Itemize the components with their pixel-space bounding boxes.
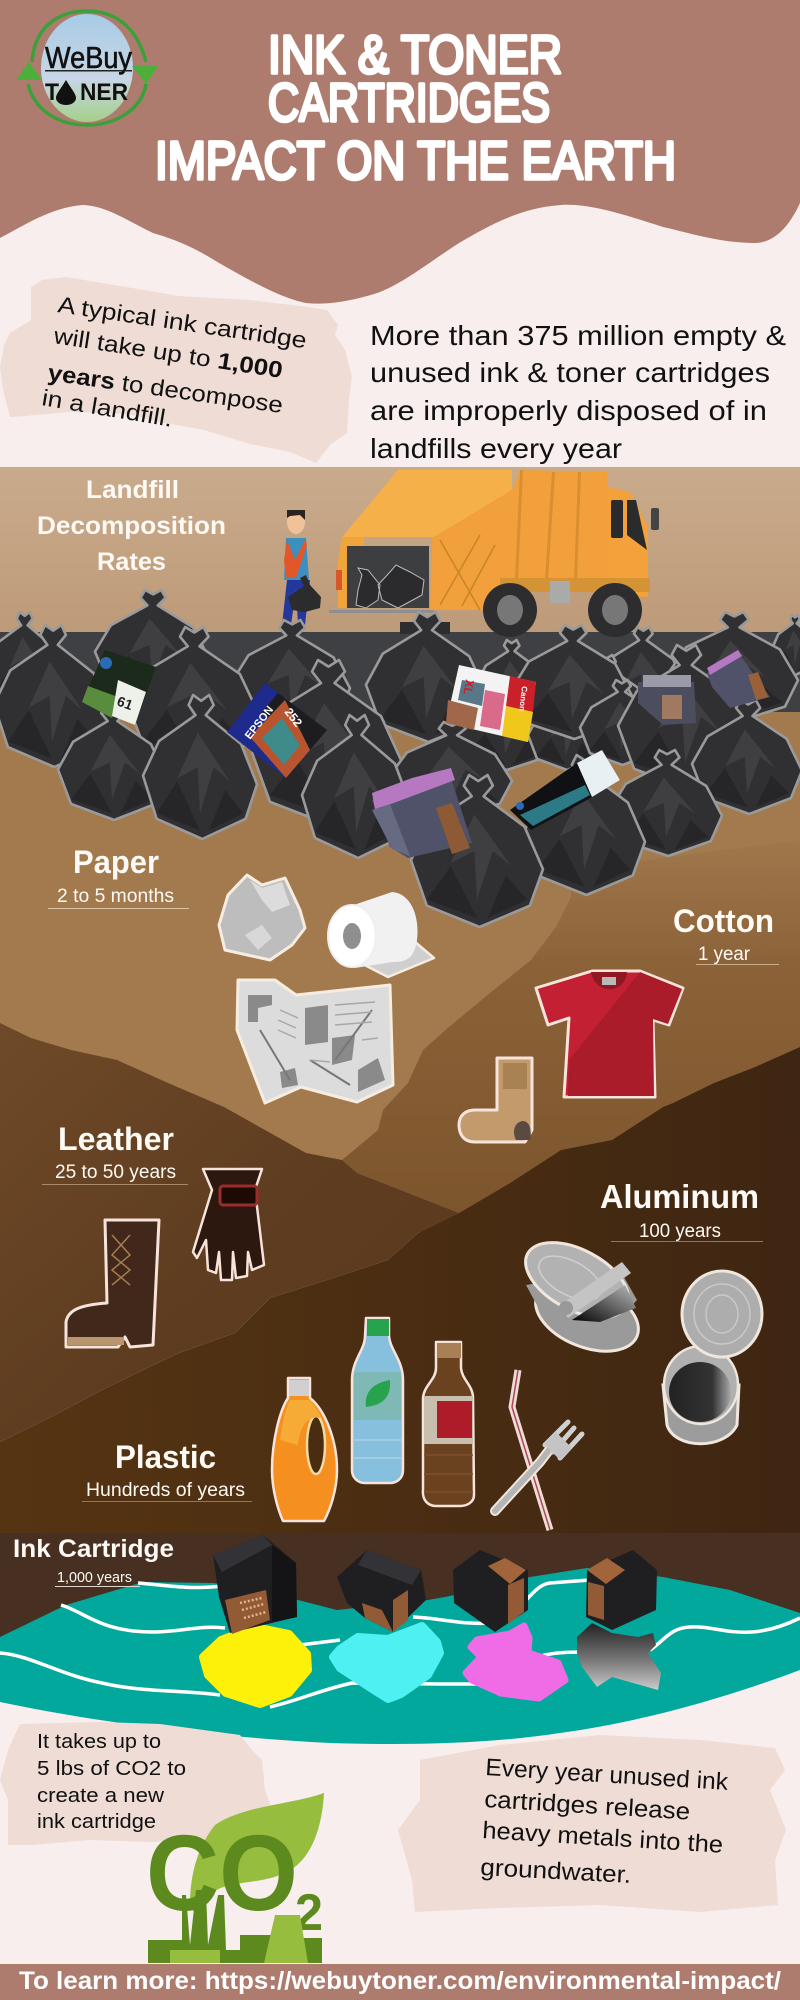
label: aluminum: 100 years xyxy=(639,1221,721,1242)
label: cotton: 1 year xyxy=(698,944,751,965)
icon: CO2 leaf and factory xyxy=(146,1793,324,1963)
icon: leather glove xyxy=(193,1169,264,1280)
heading: landfill decomposition rates: Decomposition xyxy=(37,512,226,540)
logo: WeBuy Toner: WeBuy xyxy=(45,40,132,75)
pile of garbage bags xyxy=(0,590,800,927)
garbage truck xyxy=(329,470,659,637)
text: groundwater fact xyxy=(480,1754,730,1889)
text: groundwater fact: Every year unused ink xyxy=(485,1754,730,1796)
label: paper: 2 to 5 months xyxy=(57,886,174,907)
magenta ink puddle xyxy=(466,1626,565,1698)
HP ink box: 61 xyxy=(115,693,135,713)
text: CO2 fact xyxy=(37,1731,186,1833)
icon: plastic straw xyxy=(512,1370,550,1530)
soil layer: plastic and aluminum xyxy=(0,1047,800,1534)
ink section dark band xyxy=(0,1533,800,1653)
black ink puddle xyxy=(577,1623,661,1690)
purple top ink cartridge xyxy=(707,650,770,708)
heading: landfill decomposition rates: Rates xyxy=(97,548,166,576)
Epson ink box xyxy=(227,683,327,778)
heading: landfill decomposition rates: Landfill xyxy=(86,476,179,504)
text: CO2 fact: create a new xyxy=(37,1785,165,1807)
header wave banner xyxy=(0,0,800,304)
soil layer: cotton xyxy=(342,840,800,1213)
logo: WeBuy Toner xyxy=(16,11,158,125)
Epson ink box: 252 xyxy=(282,705,305,730)
icon: red t-shirt xyxy=(536,971,683,1097)
title: INK & TONER xyxy=(268,25,562,85)
Canon ink box xyxy=(446,665,536,742)
label: aluminum: Aluminum xyxy=(600,1178,759,1215)
ink cartridge 3 xyxy=(453,1550,528,1632)
label: leather: Leather xyxy=(58,1121,174,1157)
icon: plastic fork xyxy=(495,1422,582,1511)
text: decompose fact: will take up to 1,000 xyxy=(51,322,285,383)
brush blob: groundwater fact xyxy=(398,1735,786,1912)
icon: toilet roll xyxy=(328,892,434,977)
label: cotton xyxy=(673,903,779,965)
label: leather xyxy=(42,1121,188,1185)
soil layer: leather xyxy=(0,1023,459,1442)
cyan ink puddle xyxy=(333,1626,440,1699)
title: CARTRIDGES xyxy=(268,73,550,133)
worker with bag xyxy=(282,510,321,625)
text: CO2 fact: 5 lbs of CO2 to xyxy=(37,1758,186,1780)
ink cartridge 4 xyxy=(586,1550,657,1630)
ink cartridge 2 xyxy=(337,1550,426,1632)
label: cotton: Cotton xyxy=(673,903,774,939)
text: decompose fact: in a landfill. xyxy=(40,384,175,432)
logo: WeBuy Toner: NER xyxy=(80,79,128,106)
Canon ink box: XL xyxy=(460,678,477,696)
brush blob: CO2 fact xyxy=(0,1722,272,1845)
text: decompose fact: years to decompose xyxy=(46,359,285,418)
brush blob behind decompose fact xyxy=(0,277,352,463)
icon: leather boot xyxy=(66,1220,159,1347)
label: ink cartridge xyxy=(13,1535,174,1587)
icon: CO2 leaf and factory: CO xyxy=(146,1812,298,1933)
text: 375 million fact: unused ink & toner cartridges xyxy=(370,357,770,388)
icon: opened tin can xyxy=(513,1227,649,1365)
text: groundwater fact: groundwater. xyxy=(480,1854,632,1889)
text: CO2 fact: ink cartridge xyxy=(37,1811,156,1833)
label: plastic: Hundreds of years xyxy=(86,1480,245,1501)
label: aluminum xyxy=(600,1178,763,1242)
heading: landfill decomposition rates xyxy=(37,476,226,576)
text: decompose fact xyxy=(40,291,308,432)
HP ink box xyxy=(82,650,156,725)
label: plastic xyxy=(82,1439,252,1502)
icon: water bottle xyxy=(352,1318,403,1483)
label: ink cartridge: Ink Cartridge xyxy=(13,1535,174,1563)
text: 375 million fact: are improperly disposed of in xyxy=(370,395,767,426)
landfill sky xyxy=(0,467,800,637)
footer bar xyxy=(0,1964,800,2000)
label: plastic: Plastic xyxy=(115,1439,216,1475)
icon: crumpled paper xyxy=(219,875,305,960)
label: leather: 25 to 50 years xyxy=(55,1162,176,1183)
text: groundwater fact: heavy metals into the xyxy=(482,1817,724,1859)
white water lines xyxy=(0,1580,800,1707)
toner box xyxy=(510,750,620,830)
large purple top ink cartridge xyxy=(372,768,472,858)
text: 375 million fact xyxy=(370,320,786,464)
icon: CO2 leaf and factory: 2 xyxy=(295,1884,323,1942)
Epson ink box: EPSON xyxy=(243,704,276,742)
title xyxy=(155,25,676,191)
icon: brown bottle xyxy=(423,1342,474,1506)
icon: orange detergent bottle xyxy=(272,1378,337,1521)
text: 375 million fact: landfills every year xyxy=(370,433,622,464)
icon: newspaper xyxy=(237,980,393,1103)
road xyxy=(0,632,800,722)
icon: sock xyxy=(459,1058,532,1142)
footer link text: To learn more: https://webuytoner.com/environmental-impact/ xyxy=(19,1967,781,1995)
soil layer: paper xyxy=(0,712,800,1232)
ink cartridge 1 xyxy=(213,1535,297,1634)
grey ink cartridge xyxy=(638,675,696,725)
logo: WeBuy Toner: T xyxy=(45,79,59,106)
label: ink cartridge: 1,000 years xyxy=(57,1569,132,1586)
text: groundwater fact: cartridges release xyxy=(484,1786,691,1826)
title: IMPACT ON THE EARTH xyxy=(155,131,676,191)
text: CO2 fact: It takes up to xyxy=(37,1731,161,1753)
teal groundwater xyxy=(0,1568,800,1744)
Canon ink box: Canon xyxy=(517,686,529,712)
text: decompose fact: A typical ink cartridge xyxy=(56,291,308,353)
icon: tin can with lid xyxy=(663,1271,762,1444)
text: 375 million fact: More than 375 million empty & xyxy=(370,320,786,351)
yellow ink puddle xyxy=(203,1627,308,1704)
label: paper: Paper xyxy=(73,844,159,880)
label: paper xyxy=(48,844,189,909)
